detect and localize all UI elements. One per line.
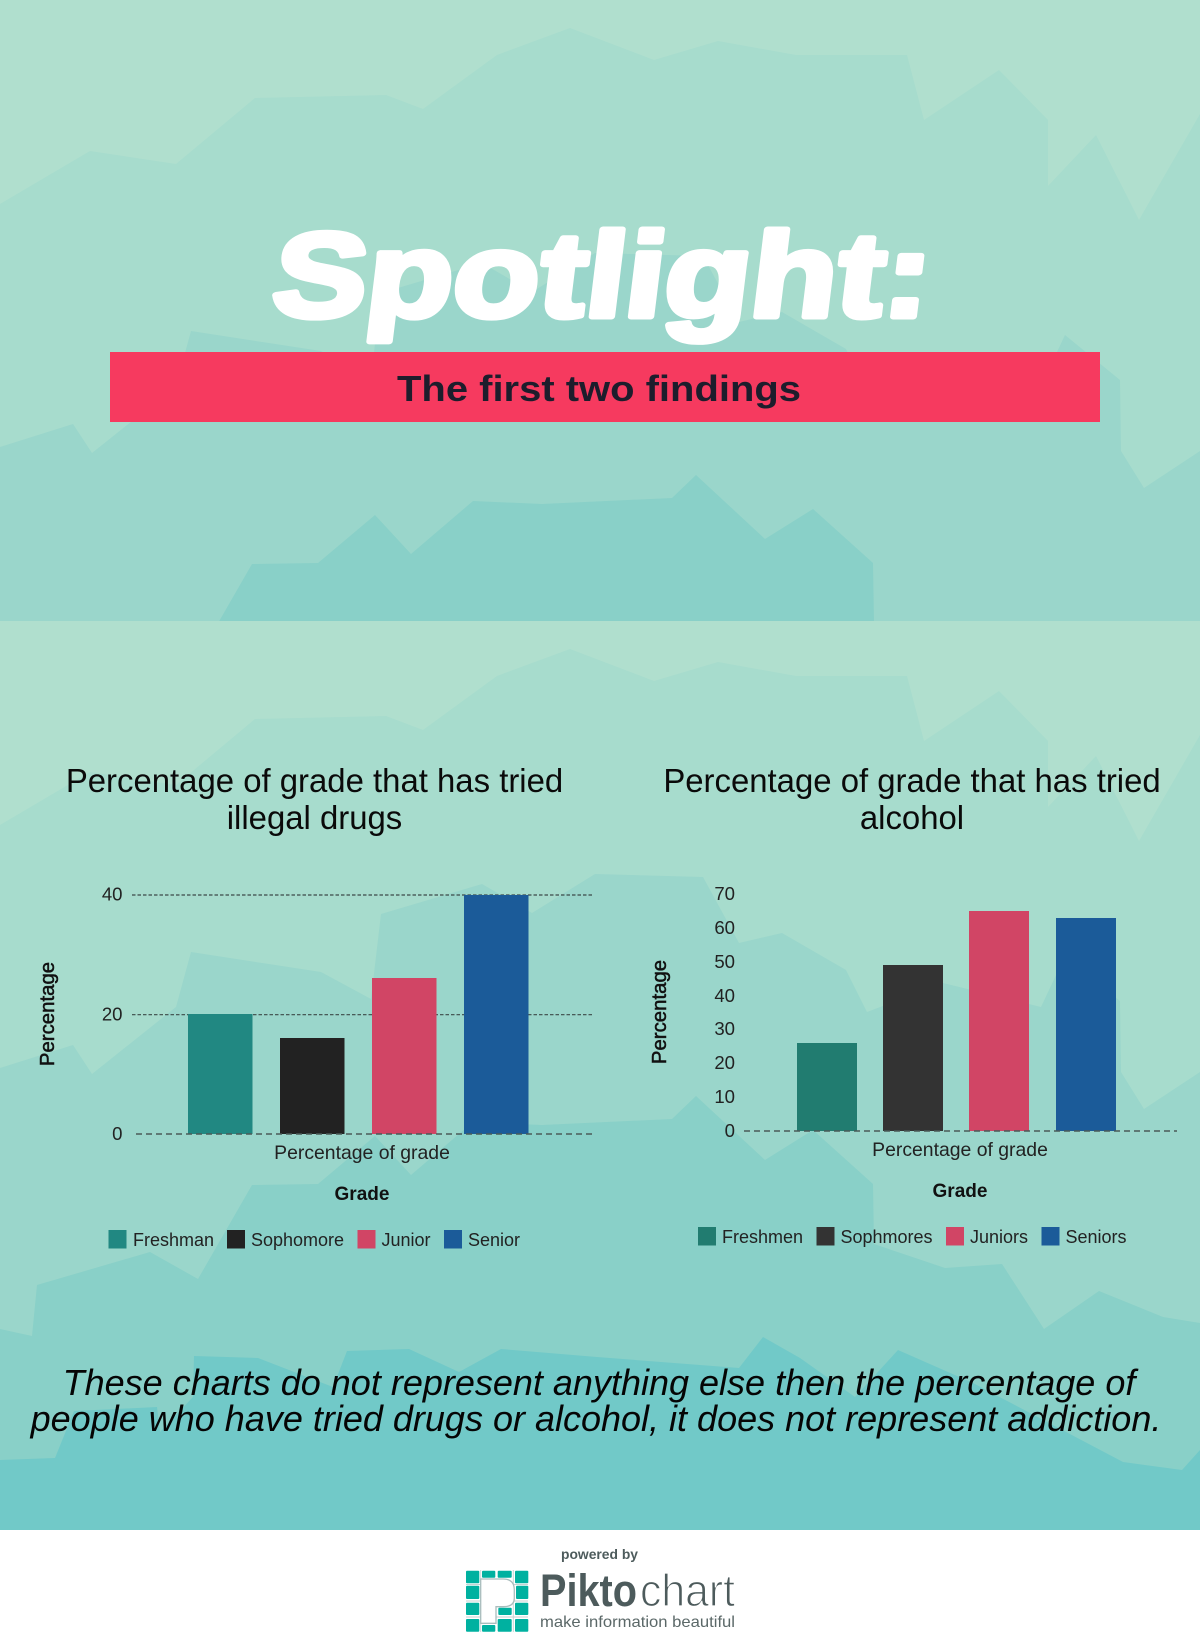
bar chart: alcohol: 40 [714, 985, 735, 1006]
footer [0, 1530, 1200, 1650]
bar chart: alcohol: 30 [714, 1018, 735, 1039]
subtitle banner: The first two findings [397, 368, 801, 409]
bar chart: alcohol: 70 [714, 883, 735, 904]
legend: alcohol [698, 1227, 1127, 1247]
chart title: illegal drugs: illegal drugs [227, 799, 402, 836]
bar chart: illegal drugs: 0 [112, 1123, 122, 1144]
bar chart: alcohol: Percentage of grade [872, 1139, 1048, 1161]
bar chart: alcohol: Grade [933, 1181, 987, 1202]
bar chart: alcohol: 60 [714, 917, 735, 938]
Piktochart wordmark: chart [640, 1565, 735, 1616]
legend: illegal drugs: Freshman [133, 1230, 214, 1250]
panel: charts background with layered mountains [0, 621, 1200, 1530]
disclaimer note: people who have tried drugs or alcohol, it does not represent addiction. [30, 1398, 1161, 1439]
Piktochart wordmark: Pikto [540, 1565, 637, 1616]
legend: illegal drugs [108, 1230, 520, 1250]
chart title: alcohol: alcohol [860, 799, 964, 836]
tagline: make information beautiful [540, 1614, 735, 1631]
legend: alcohol: Juniors [970, 1227, 1028, 1247]
bar chart: illegal drugs: Percentage of grade [274, 1142, 450, 1164]
icon: Piktochart logo mark [466, 1570, 528, 1632]
chart title: alcohol [663, 762, 1161, 836]
chart title: alcohol: Percentage of grade that has tried [663, 762, 1161, 799]
legend: illegal drugs: Senior [468, 1230, 520, 1250]
powered by label: powered by [561, 1546, 638, 1562]
bar chart: alcohol: 10 [714, 1086, 735, 1107]
bar chart: alcohol: 20 [714, 1052, 735, 1073]
bar chart: alcohol: 50 [714, 951, 735, 972]
title: Spotlight: [266, 208, 940, 342]
bar chart: illegal drugs: 40 [102, 884, 122, 904]
legend: alcohol: Seniors [1066, 1227, 1127, 1247]
chart title: illegal drugs: Percentage of grade that has tried [66, 762, 563, 799]
legend: illegal drugs: Sophomore [251, 1230, 344, 1250]
legend: illegal drugs: Junior [382, 1230, 431, 1250]
panel: header background with layered mountains [0, 0, 1200, 621]
subtitle banner [110, 352, 1100, 422]
bar chart: illegal drugs [37, 884, 593, 1205]
disclaimer note: These charts do not represent anything else then the percentage of [63, 1362, 1139, 1403]
bar chart: alcohol: Percentage [649, 960, 671, 1064]
bar chart: alcohol [649, 883, 1177, 1202]
Piktochart wordmark [540, 1565, 735, 1616]
legend: alcohol: Freshmen [722, 1227, 803, 1247]
bar chart: illegal drugs: 20 [102, 1004, 122, 1024]
bar chart: alcohol: 0 [725, 1120, 735, 1141]
legend: alcohol: Sophmores [840, 1227, 933, 1247]
chart title: illegal drugs [66, 762, 563, 836]
bar chart: illegal drugs: Grade [335, 1184, 389, 1205]
disclaimer note [30, 1362, 1161, 1439]
bar chart: illegal drugs: Percentage [37, 962, 59, 1066]
